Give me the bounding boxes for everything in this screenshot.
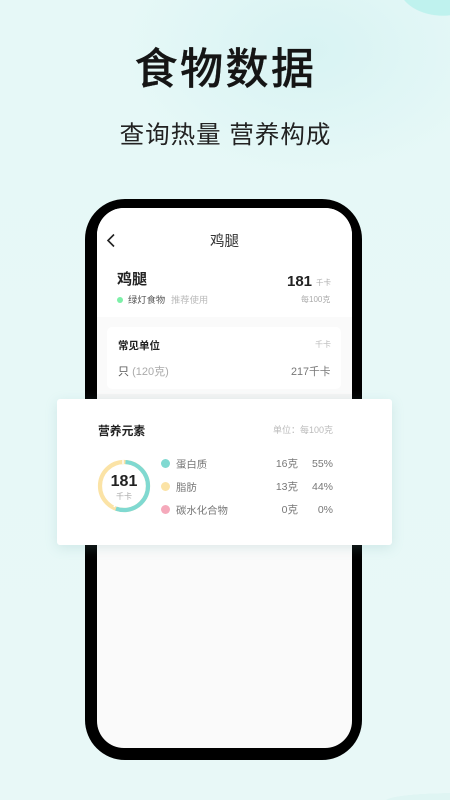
protein percent: 55% bbox=[312, 458, 333, 470]
legend row: carbs bbox=[161, 504, 333, 517]
carbs dot bbox=[161, 505, 170, 514]
unit name: 只 (120克) bbox=[118, 366, 169, 378]
calories value: 181 bbox=[287, 273, 312, 290]
legend row: protein bbox=[161, 458, 333, 471]
screen title: 鸡腿 bbox=[210, 234, 239, 250]
donut unit: 千卡 bbox=[116, 492, 132, 501]
fat dot bbox=[161, 482, 170, 491]
phone mockup bbox=[85, 199, 362, 760]
title: 食物数据 bbox=[134, 46, 316, 94]
fat label: 脂肪 bbox=[176, 483, 197, 494]
header panel bbox=[97, 208, 352, 317]
fat percent: 44% bbox=[312, 481, 333, 493]
phone screen bbox=[97, 208, 352, 748]
carbs percent: 0% bbox=[318, 504, 333, 516]
icon: back arrow bbox=[107, 234, 114, 248]
panel: nutrition card bbox=[57, 399, 392, 545]
unit calories: 217千卡 bbox=[291, 366, 331, 378]
carbs label: 碳水化合物 bbox=[176, 506, 228, 517]
units column label: 千卡 bbox=[315, 340, 331, 349]
card heading: 营养元素 bbox=[98, 424, 145, 438]
green food label: 绿灯食物 bbox=[128, 295, 165, 305]
fat grams: 13克 bbox=[276, 481, 298, 493]
green dot bbox=[117, 297, 123, 303]
protein dot bbox=[161, 459, 170, 468]
recommendation label: 推荐使用 bbox=[171, 295, 208, 305]
units heading: 常见单位 bbox=[118, 340, 160, 352]
protein grams: 16克 bbox=[276, 458, 298, 470]
carbs grams: 0克 bbox=[282, 504, 298, 516]
legend row: fat bbox=[161, 481, 333, 494]
donut chart bbox=[98, 460, 150, 512]
protein label: 蛋白质 bbox=[176, 460, 207, 471]
donut value: 181 bbox=[111, 473, 137, 490]
calories unit: 千卡 bbox=[316, 278, 331, 287]
grey divider strip bbox=[97, 394, 352, 545]
food name: 鸡腿 bbox=[117, 271, 147, 288]
per 100g label: 每100克 bbox=[301, 295, 330, 304]
subtitle: 查询热量 营养构成 bbox=[120, 122, 331, 149]
panel: common units bbox=[107, 327, 341, 389]
card unit label: 单位：每100克 bbox=[273, 425, 333, 435]
